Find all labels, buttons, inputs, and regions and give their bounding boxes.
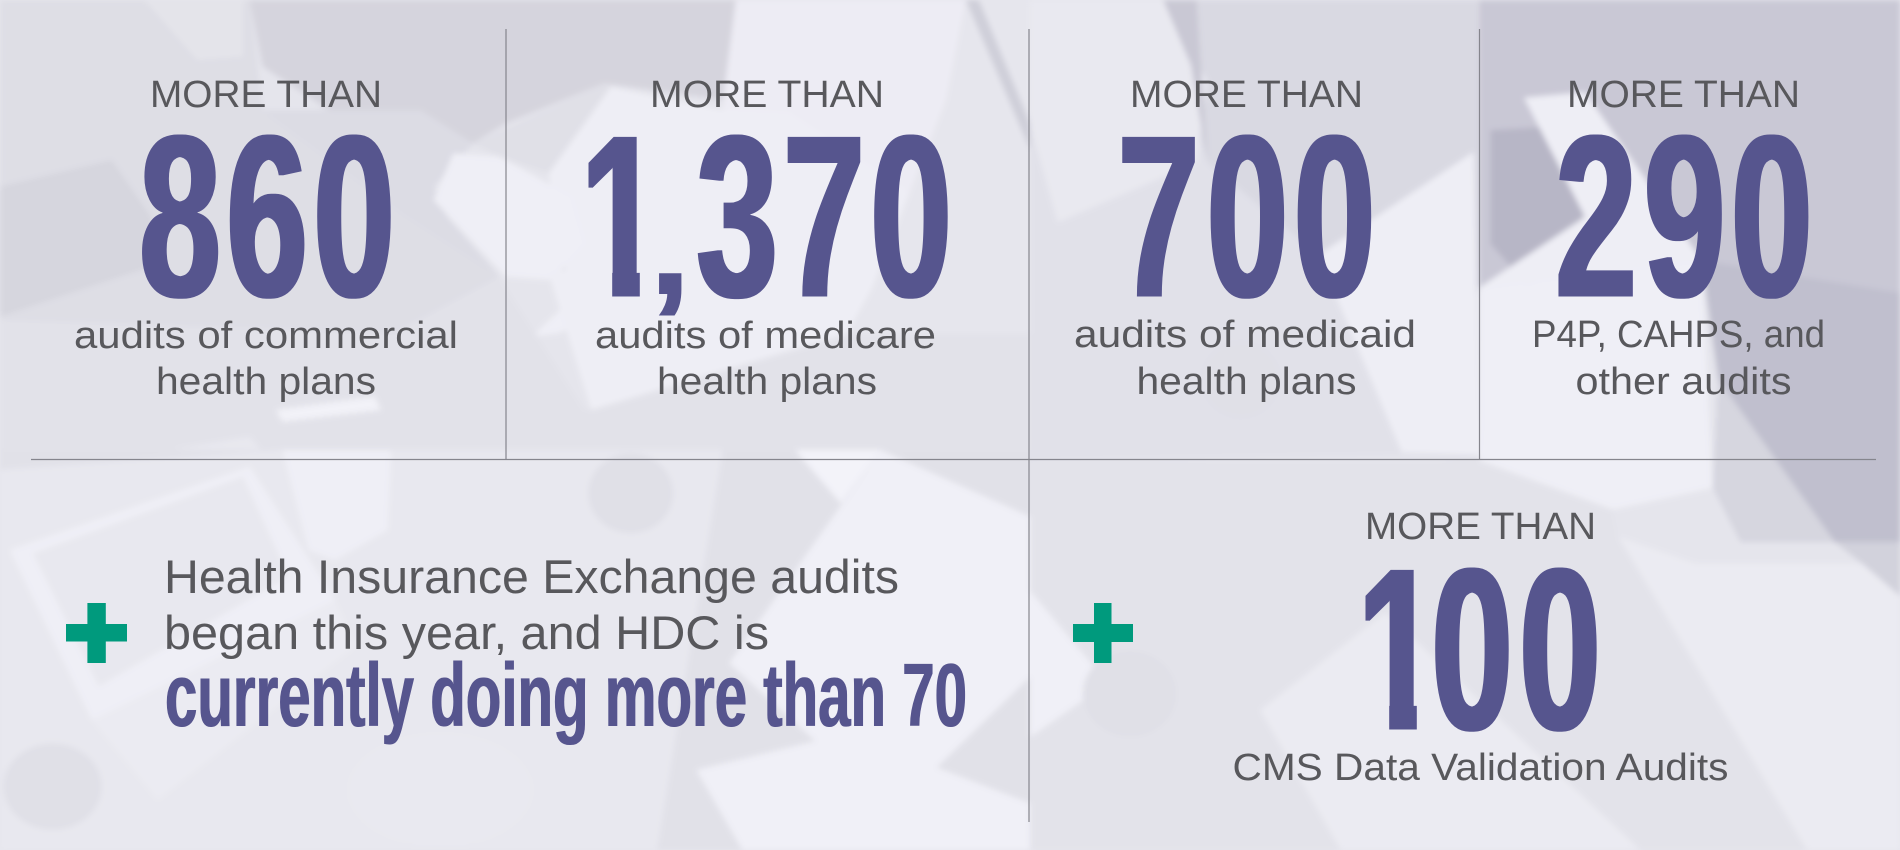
label: more than: MORE THAN	[150, 74, 382, 116]
caption: CMS data validation audits: CMS Data Validation Audits	[1232, 747, 1728, 789]
caption: medicaid health plans: audits of medicaid	[1074, 314, 1416, 356]
panel: medicaid audits	[1074, 74, 1416, 403]
caption: P4P, CAHPS and other audits: P4P, CAHPS, and	[1532, 314, 1825, 356]
caption: medicare health plans: health plans	[657, 361, 877, 403]
number: 290: 290	[1555, 87, 1812, 347]
icon: green plus	[1073, 603, 1133, 663]
number: 1,370: ,	[652, 168, 688, 324]
number: 100: 00	[1431, 520, 1601, 780]
label: more than: MORE THAN	[1130, 74, 1363, 116]
label: more than: MORE THAN	[1567, 74, 1800, 116]
number: 1,370: 1	[580, 87, 662, 347]
panel: CMS data validation audits	[1073, 506, 1728, 789]
caption: commercial health plans: health plans	[156, 361, 376, 403]
panel: commercial audits	[74, 74, 458, 403]
number: 860: 860	[139, 87, 395, 347]
caption: P4P, CAHPS and other audits: other audits	[1576, 361, 1792, 403]
panel: medicare audits	[580, 74, 952, 403]
caption: commercial health plans	[74, 315, 458, 403]
number: 100	[1366, 568, 1597, 732]
text block: exchange audits	[164, 550, 899, 659]
caption: medicare health plans	[595, 315, 936, 403]
caption: P4P, CAHPS and other audits	[1532, 314, 1825, 403]
caption: medicare health plans: audits of medicare	[595, 315, 936, 357]
text block: exchange audits: Health Insurance Exchange audits	[164, 550, 899, 603]
panel: P4P and CAHPS audits	[1532, 74, 1825, 403]
icon: green plus	[66, 603, 127, 663]
label: more than: MORE THAN	[650, 74, 884, 116]
panel: health insurance exchange audits	[66, 550, 967, 746]
caption: medicaid health plans	[1074, 314, 1416, 403]
number: 1,370	[588, 134, 948, 316]
caption: commercial health plans: audits of commercial	[74, 315, 458, 357]
label: more than: MORE THAN	[1365, 506, 1596, 548]
number: 1,370: 370	[696, 87, 952, 347]
highlight: currently doing more than 70: currently doing more than 70	[165, 646, 967, 746]
number: 100: 1	[1358, 520, 1439, 780]
number: 700: 700	[1118, 87, 1375, 347]
text block: exchange audits: began this year, and HDC is	[164, 606, 769, 659]
caption: medicaid health plans: health plans	[1136, 361, 1356, 403]
